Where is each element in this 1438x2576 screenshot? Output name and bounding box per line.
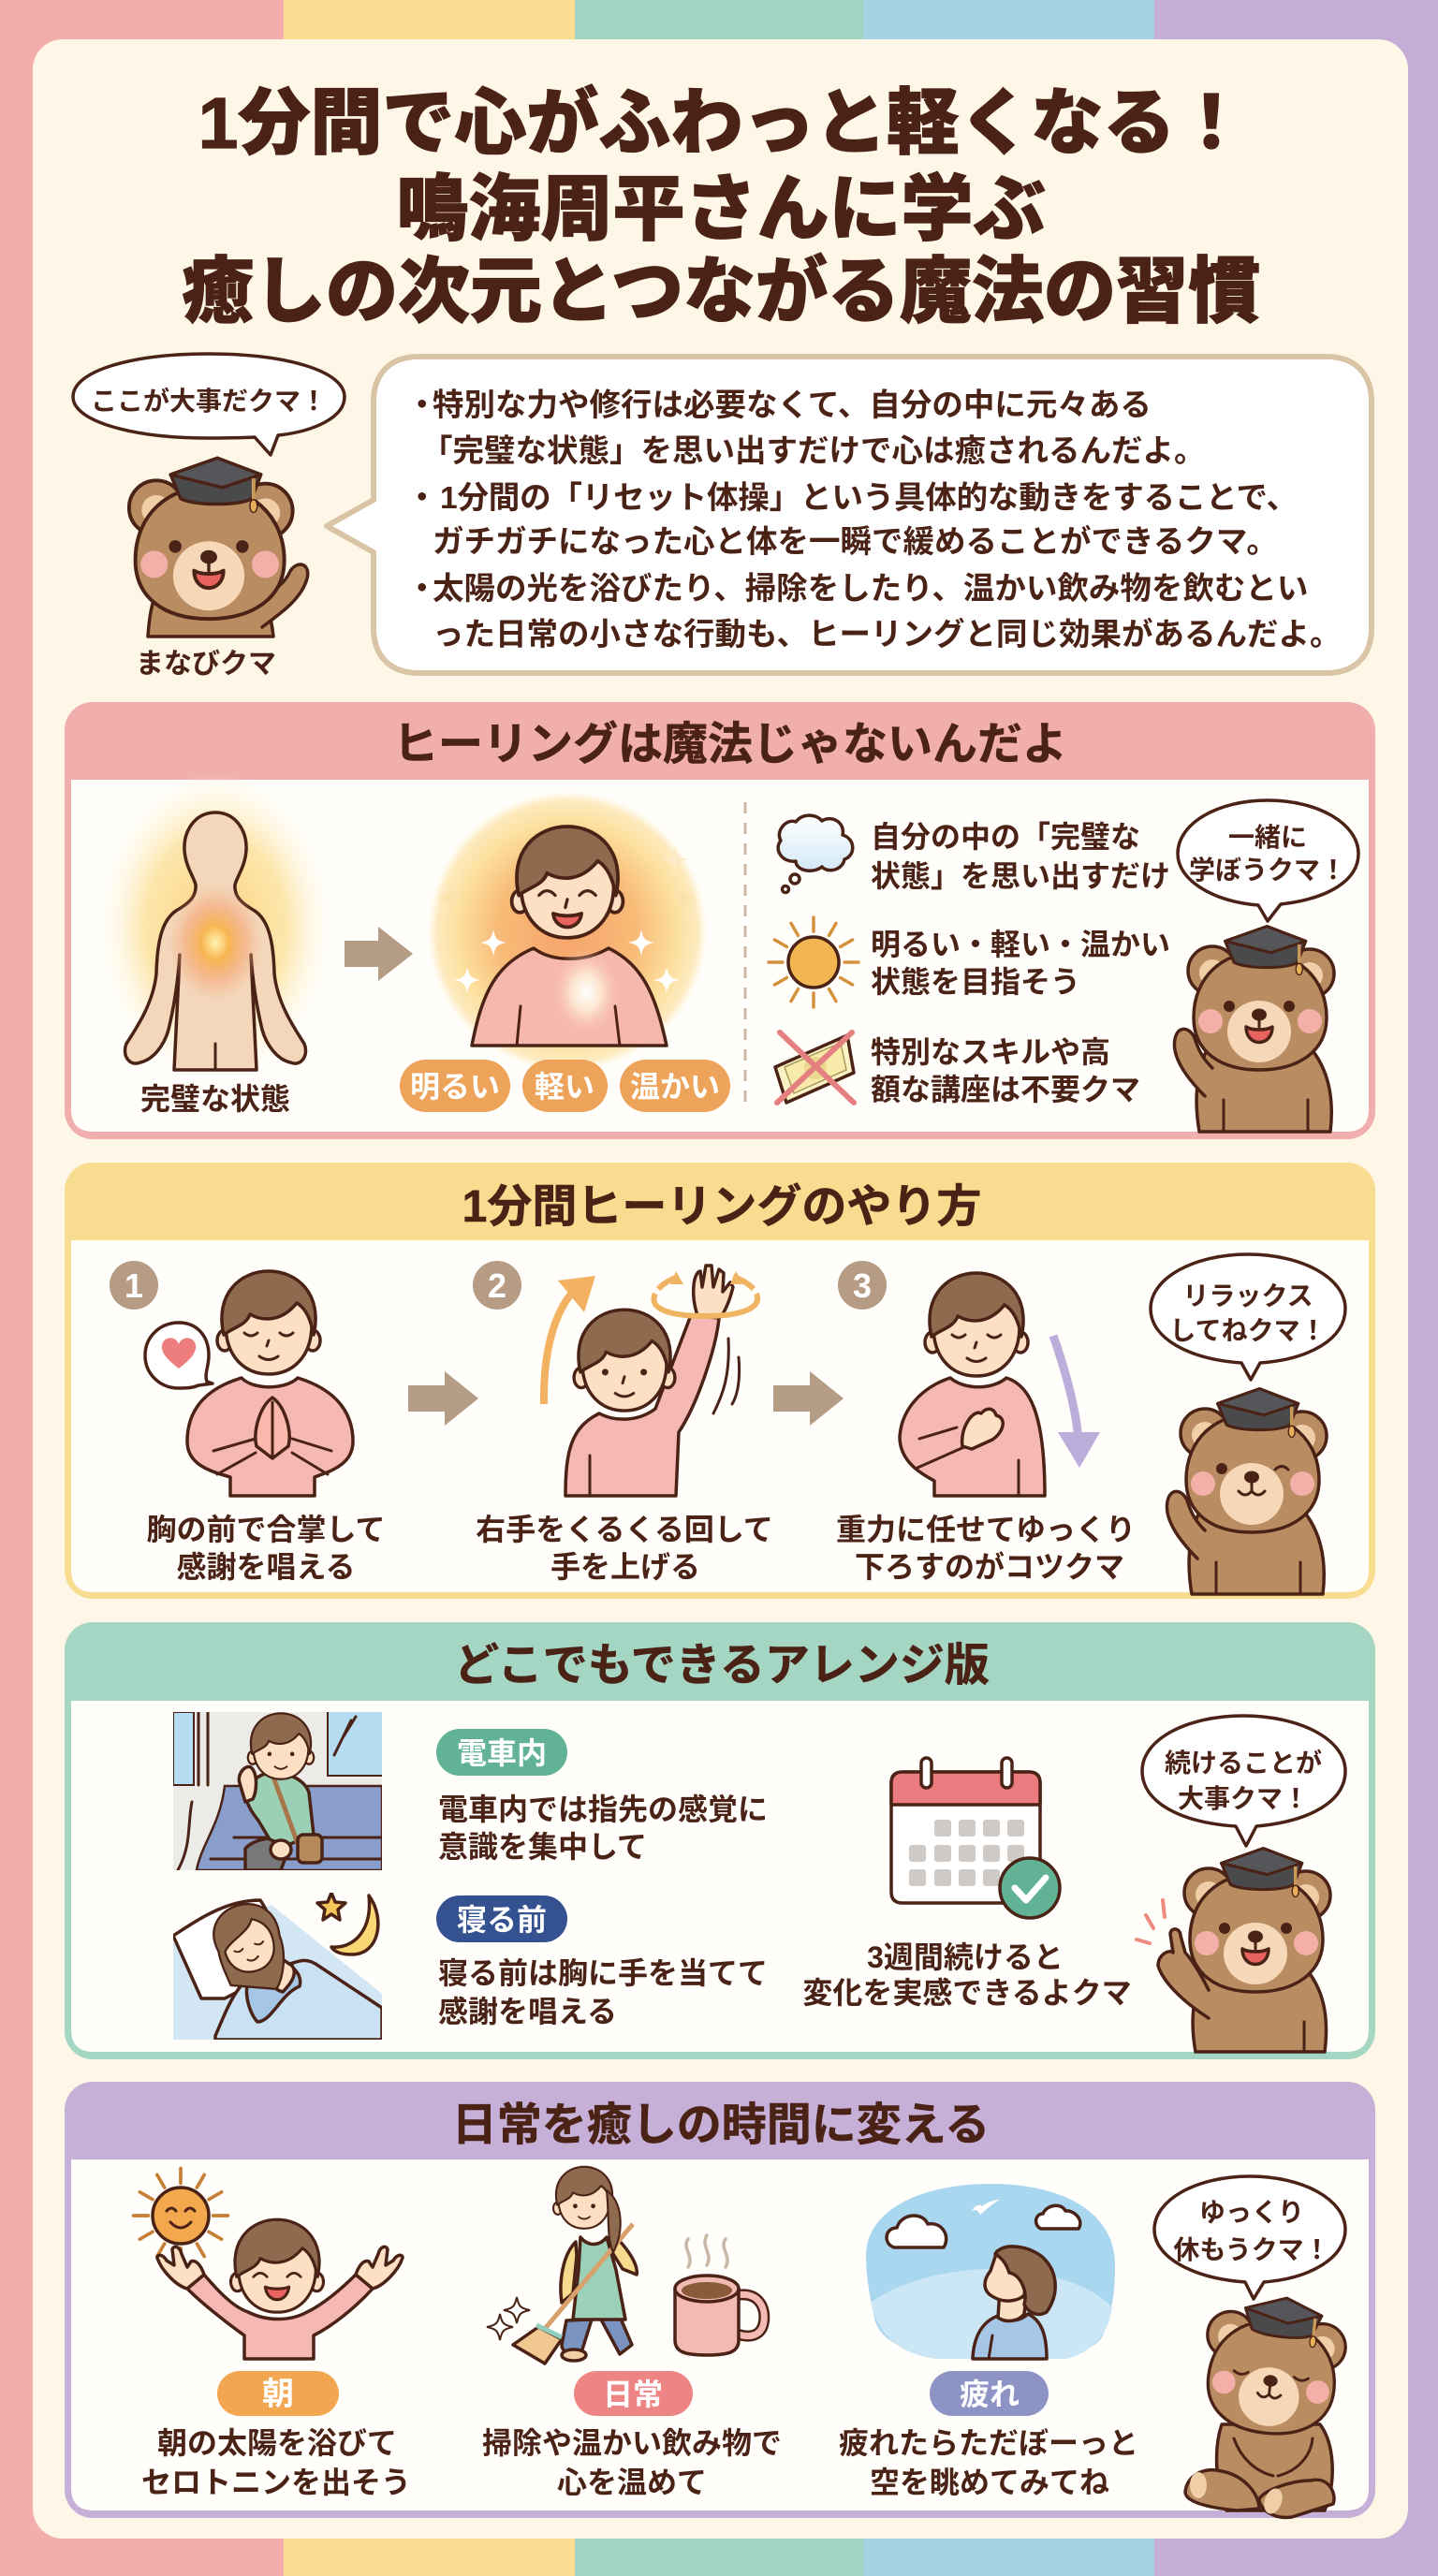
title: 鳴海周平さんに学ぶ <box>397 169 1045 250</box>
mascot: waving bear <box>1174 927 1334 1132</box>
text: 寝る前 <box>438 1956 768 2028</box>
text: 3週間続ける: 3週間続けると <box>867 1940 1064 1974</box>
caption: step 3: 下ろすのがコツクマ <box>855 1550 1124 1584</box>
illustration: person raising hand <box>565 1266 740 1496</box>
illustration: praying person <box>187 1271 353 1496</box>
speech bubble: 一緒に学ぼうクマ: 一緒に <box>1228 823 1307 852</box>
caption: 疲れ: 疲れたらただぼーっと <box>839 2426 1138 2460</box>
bullet point 2: ・ <box>406 481 438 516</box>
panel: ヒーリングは魔法じゃないんだよ <box>65 702 1375 1139</box>
illustration: glowing smiling person <box>427 791 708 1072</box>
tag: 疲れ: 疲れ <box>960 2378 1020 2411</box>
arrow: rotation ring <box>653 1271 757 1316</box>
title: 癒しの次元とつながる魔法の習慣 <box>182 252 1260 332</box>
tag: 電車内: 電車内 <box>457 1736 547 1770</box>
text: 明るい軽い温かい <box>871 928 1170 999</box>
step 2 number: 2 <box>488 1266 506 1305</box>
caption: step 2: 右手をくるくる回して <box>476 1513 773 1546</box>
speech bubble: ゆっくり休もうクマ: 休もうクマ！ <box>1173 2235 1330 2264</box>
speech bubble: ゆっくり休もうクマ: ゆっくり <box>1199 2198 1304 2227</box>
speech bubble: リラックスしてねクマ: リラックス <box>1182 1281 1313 1310</box>
callout: key points <box>327 357 1372 673</box>
bullet point 1 <box>406 388 1206 469</box>
text: 完璧な状態: 状態」を思い出すだけ <box>871 859 1170 893</box>
speech bubble: 続けることが大事クマ: 大事クマ！ <box>1178 1784 1309 1813</box>
text: 特別なスキル: 額な講座は不要クマ <box>871 1073 1140 1106</box>
caption: step 1 <box>146 1513 386 1584</box>
heading: どこでもできるアレンジ版 <box>454 1641 990 1690</box>
arrow <box>773 1371 844 1426</box>
step 2 number <box>473 1261 521 1310</box>
caption: step 2: 手を上げる <box>550 1550 700 1584</box>
caption: step 1: 感謝を唱える <box>176 1550 356 1584</box>
mascot: まなびクマ: まなびクマ <box>136 649 276 680</box>
arrow: gravity falling <box>1053 1336 1100 1468</box>
speech bubble: 一緒に学ぼうクマ <box>1178 800 1358 921</box>
caption: 日常: 掃除や温かい飲み物で <box>482 2426 782 2460</box>
bullet point 3: った日常の小さな行動も、ヒーリングと同じ効果があるんだよ。 <box>433 617 1341 652</box>
caption: 日常: 心を温めて <box>557 2466 707 2499</box>
caption: step 3: 重力に任せてゆっくり <box>836 1513 1136 1546</box>
icon: thought cloud <box>778 815 853 893</box>
heading: 1分間ヒーリングのやり方 <box>462 1182 981 1232</box>
caption: step 1: 胸の前で合掌して <box>146 1513 386 1546</box>
caption: 朝 <box>141 2426 411 2499</box>
icon: sun <box>769 917 858 1007</box>
tags: 明るい 軽い 温かい: 温かい <box>630 1070 720 1104</box>
text: 完璧な状態 <box>871 820 1170 893</box>
icon: pointing sparks <box>1137 1900 1165 1943</box>
text: 電車内: 意識を集中して <box>438 1830 647 1864</box>
step 3 number <box>838 1261 887 1310</box>
caption: 疲れ: 空を眺めてみてね <box>870 2466 1109 2499</box>
text: 電車内: 電車内では指先の感覚に <box>438 1793 768 1826</box>
illustration: person sweeping <box>487 2167 637 2364</box>
bullet point 1: 特別な力や修行は必要なくて、自分の中に元々ある <box>433 388 1152 423</box>
caption: 朝: セロトニンを出そう <box>141 2466 411 2499</box>
arrow: rising motion <box>544 1276 595 1404</box>
text: 3週間続ける: 変化を実感できるよクマ <box>802 1976 1132 2010</box>
tag: 電車内 <box>436 1729 567 1776</box>
speech bubble: リラックスしてねクマ <box>1151 1254 1345 1380</box>
speech bubble: リラックスしてねクマ: してねクマ！ <box>1169 1316 1327 1345</box>
caption: 朝: 朝の太陽を浴びて <box>157 2426 397 2460</box>
label: 完璧な状態: 完璧な状態 <box>140 1082 290 1116</box>
mascot: pointing bear <box>1158 1849 1330 2052</box>
tag: 日常 <box>574 2371 693 2416</box>
tag: 寝る前: 寝る前 <box>457 1903 547 1937</box>
text: 特別なスキル: 特別なスキルや高 <box>871 1035 1110 1069</box>
icon: hot drink mug <box>675 2235 764 2355</box>
illustration: person with arms raised <box>157 2219 403 2359</box>
icon: smiling sun <box>134 2169 227 2262</box>
speech bubble: ゆっくり休もうクマ <box>1154 2176 1345 2299</box>
panel: 1分間ヒーリングのやり方 <box>65 1163 1375 1599</box>
bullet point 1: ・ <box>406 388 438 423</box>
icon: heart bubble <box>145 1323 213 1388</box>
illustration: person in bed <box>173 1893 382 2040</box>
illustration: silhouette with glow <box>98 772 332 1081</box>
title: 1分間で心がふわっと軽くなる！ <box>198 83 1247 164</box>
tags: 明るい 軽い 温かい: 明るい <box>410 1070 500 1104</box>
icon: crossed-out money <box>775 1032 854 1103</box>
caption: step 3 <box>836 1513 1136 1584</box>
text: 寝る前: 寝る前は胸に手を当てて <box>438 1956 768 1990</box>
tag: 日常: 日常 <box>603 2378 663 2411</box>
bullet point 1: 「完璧な状態」を思い出すだけで心は癒されるんだよ。 <box>421 434 1206 469</box>
tag: 疲れ <box>930 2371 1049 2416</box>
mascot: まなびクマ <box>129 458 308 680</box>
arrow <box>408 1371 478 1426</box>
text: 完璧な状態: 自分の中の「完璧な <box>871 820 1140 854</box>
tags: 明るい 軽い 温かい: 軽い <box>535 1070 594 1104</box>
text: 寝る前: 感謝を唱える <box>438 1995 617 2028</box>
step 3 number: 3 <box>853 1266 872 1305</box>
bullet point 2 <box>406 481 1298 560</box>
bullet point 3: ・ <box>406 572 438 607</box>
bullet point 2: 1分間の「リセット体操」という具体的な動きをすることで、 <box>440 481 1298 516</box>
speech bubble: 一緒に学ぼうクマ: 学ぼうクマ！ <box>1189 856 1346 885</box>
bullet point 3: 太陽の光を浴びたり、掃除をしたり、温かい飲み物を飲むとい <box>433 572 1308 607</box>
illustration: looking at the sky <box>866 2184 1115 2359</box>
step 1 number <box>110 1261 158 1310</box>
icon: calendar with check <box>891 1758 1060 1918</box>
bullet point 3 <box>406 572 1341 652</box>
panel: 日常を癒しの時間に変える <box>65 2082 1375 2518</box>
heading: ヒーリングは魔法じゃないんだよ <box>393 720 1067 769</box>
step 1 number: 1 <box>125 1266 143 1305</box>
speech bubble: ここが大事だクマ: ここが大事だクマ！ <box>91 386 327 416</box>
bullet point 2: ガチガチになった心と体を一瞬で緩めることができるクマ。 <box>433 524 1278 560</box>
illustration: person on train <box>173 1708 388 1870</box>
tags: 明るい 軽い 温かい <box>400 1060 730 1112</box>
speech bubble: ここが大事だクマ <box>73 354 345 455</box>
text: 3週間続ける <box>802 1940 1132 2010</box>
tag: 朝: 朝 <box>262 2377 294 2412</box>
tag: 朝 <box>217 2371 339 2416</box>
speech bubble: 続けることが大事クマ <box>1142 1716 1345 1846</box>
text: 明るい軽い温かい: 状態を目指そう <box>871 965 1080 999</box>
mascot: relaxed bear <box>1167 1389 1327 1594</box>
heading: 日常を癒しの時間に変える <box>452 2100 990 2150</box>
arrow <box>345 927 413 981</box>
caption: 日常 <box>482 2426 782 2499</box>
panel: どこでもできるアレンジ版 <box>65 1622 1375 2059</box>
mascot: sitting sleepy bear <box>1185 2291 1350 2517</box>
text: 電車内 <box>438 1793 768 1864</box>
speech bubble: 続けることが大事クマ: 続けることが <box>1165 1748 1322 1778</box>
tag: 寝る前 <box>436 1895 567 1942</box>
caption: 疲れ <box>839 2426 1138 2499</box>
title <box>182 83 1260 332</box>
text: 特別なスキル <box>871 1035 1140 1106</box>
caption: step 2 <box>476 1513 773 1584</box>
illustration: person hand on chest <box>900 1273 1045 1496</box>
text: 明るい軽い温かい: 明るい・軽い・温かい <box>871 928 1170 961</box>
